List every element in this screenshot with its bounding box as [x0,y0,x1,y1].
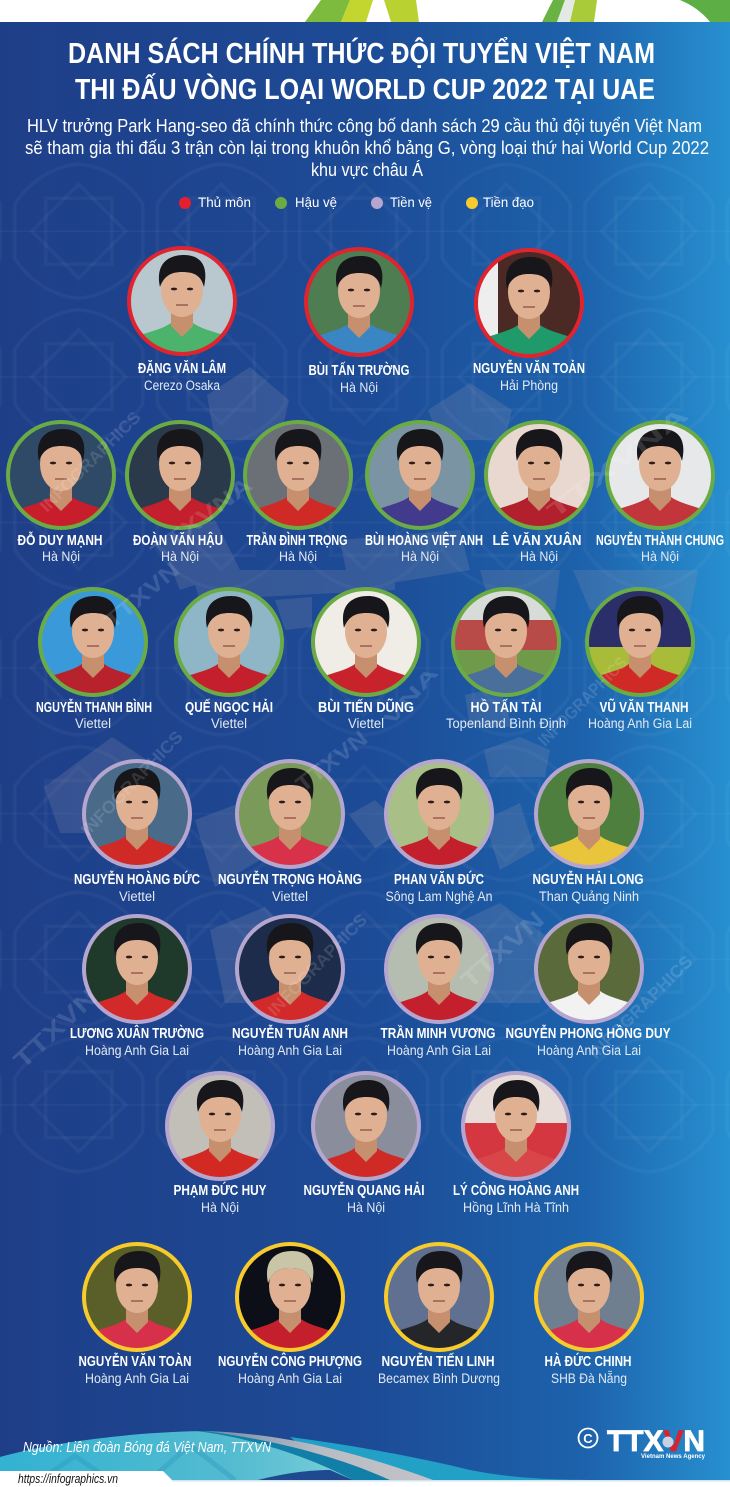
player: Bùi Tấn Trường: Hà Nội [340,380,378,395]
website url: https://infographics.vn [18,1471,118,1486]
player: Nguyễn Trọng Hoàng: NGUYỄN TRỌNG HOÀNG [218,871,362,888]
player: Đặng Văn Lâm [127,246,237,390]
player: Phan Văn Đức [384,759,494,904]
player: Nguyễn Tuấn Anh [228,916,352,1058]
watermarks: INFOGRAPHICS [36,408,145,516]
player: Nguyễn Văn Toàn [75,1244,199,1386]
player: Trần Đình Trọng: Hà Nội [279,549,317,564]
player: Trần Minh Vương: TRẦN MINH VƯƠNG [380,1025,496,1042]
player: Nguyễn Trọng Hoàng: Viettel [272,889,308,904]
player: Đặng Văn Lâm: ĐẶNG VĂN LÂM [138,359,226,377]
watermarks: TTXVN [9,984,103,1074]
player: Lương Xuân Trường: Hoàng Anh Gia Lai [85,1043,189,1058]
player: Phan Văn Đức: PHAN VĂN ĐỨC [394,870,484,888]
player: Nguyễn Thành Chung [596,422,724,564]
watermarks: TTXVN [291,726,372,797]
player: Lương Xuân Trường [70,916,204,1058]
player: Đỗ Duy Mạnh: ĐỖ DUY MẠNH [18,531,102,549]
player: Hà Đức Chinh [534,1242,644,1386]
player: Đoàn Văn Hậu [125,420,235,563]
player: Vũ Văn Thanh: Hoàng Anh Gia Lai [588,716,692,731]
player: Đặng Văn Lâm: Cerezo Osaka [144,378,220,393]
player: Quế Ngọc Hải: Viettel [211,716,247,731]
watermarks: INFOGRAPHICS [77,727,187,840]
player: Nguyễn Thành Chung: Hà Nội [641,549,679,564]
player: Đoàn Văn Hậu: Hà Nội [161,549,199,564]
legend: Tiền vệ [390,194,432,210]
player: Nguyễn Tuấn Anh: NGUYỄN TUẤN ANH [232,1025,348,1042]
watermarks: TTXVN [456,906,550,994]
player: Nguyễn Quang Hải: Hà Nội [347,1200,385,1215]
player: Nguyễn Tuấn Anh: Hoàng Anh Gia Lai [238,1043,342,1058]
player: Nguyễn Văn Toàn: Hoàng Anh Gia Lai [85,1371,189,1386]
player: Nguyễn Quang Hải: NGUYỄN QUANG HẢI [304,1182,424,1199]
player: Lê Văn Xuân [484,420,594,563]
TTXVN logo: TTXVN [607,1425,705,1458]
copyright symbol [578,1428,598,1448]
player: Phạm Đức Huy: PHẠM ĐỨC HUY [174,1181,267,1199]
watermarks [9,402,696,1074]
top white strip [0,0,730,22]
player: Nguyễn Văn Toản: Hải Phòng [500,378,558,393]
player: Nguyễn Văn Toản [467,250,591,393]
player: Nguyễn Thanh Bình [31,589,155,731]
player: Lý Công Hoàng Anh: LÝ CÔNG HOÀNG ANH [453,1181,579,1199]
watermarks: TTXVNA [146,472,257,564]
player: Nguyễn Công Phượng [218,1244,362,1386]
player: Nguyễn Văn Toàn: NGUYỄN VĂN TOÀN [78,1353,192,1370]
player: Bùi Tiến Dũng [311,587,421,728]
player: Phạm Đức Huy [165,1071,275,1214]
intro paragraph: khu vực châu Á [311,159,424,180]
TTXVN logo: Vietnam News Agency [641,1454,706,1460]
footer wave [0,1431,605,1480]
source line: Nguồn: Liên đoàn Bóng đá Việt Nam, TTXVN [23,1440,271,1456]
player: Bùi Tiến Dũng: Viettel [348,716,384,731]
player: Nguyễn Hoàng Đức: Viettel [119,889,155,904]
player: Bùi Hoàng Việt Anh [358,422,483,564]
player: Nguyễn Phong Hồng Duy [506,916,671,1058]
player: Nguyễn Văn Toản: NGUYỄN VĂN TOẢN [473,360,585,377]
player: Trần Đình Trọng [243,420,353,563]
player: Nguyễn Quang Hải [304,1073,428,1215]
player: Lý Công Hoàng Anh [453,1073,579,1215]
player: Nguyễn Hải Long [527,761,651,904]
watermarks: INFOGRAPHICS [585,952,696,1063]
player: Bùi Tấn Trường: BÙI TẤN TRƯỜNG [308,361,410,379]
player: Hà Đức Chinh: HÀ ĐỨC CHINH [544,1352,632,1370]
player: Bùi Tiến Dũng: BÙI TIẾN DŨNG [318,698,414,716]
legend [179,194,534,210]
player: Nguyễn Tiến Linh: NGUYỄN TIẾN LINH [382,1353,494,1370]
player: Nguyễn Hải Long: NGUYỄN HẢI LONG [532,871,644,888]
player: Bùi Hoàng Việt Anh: Hà Nội [401,549,439,564]
player: Hồ Tấn Tài [444,589,568,731]
player: Nguyễn Phong Hồng Duy: Hoàng Anh Gia Lai [537,1043,641,1058]
player: Nguyễn Tiến Linh [377,1244,501,1386]
player: Vũ Văn Thanh [585,587,695,731]
player: Lương Xuân Trường: LƯƠNG XUÂN TRƯỜNG [70,1024,204,1042]
player: Phạm Đức Huy: Hà Nội [201,1200,239,1215]
player: Vũ Văn Thanh: VŨ VĂN THANH [600,698,688,716]
player: Bùi Hoàng Việt Anh: BÙI HOÀNG VIỆT ANH [365,531,483,549]
player: Quế Ngọc Hải [174,587,284,728]
player: Hồ Tấn Tài: HỒ TẤN TÀI [470,698,542,716]
decorative green ribbons [305,0,730,22]
player: Nguyễn Thanh Bình: Viettel [75,716,111,731]
player: Đỗ Duy Mạnh [0,422,123,564]
intro paragraph [25,115,709,180]
player: Bùi Tấn Trường [304,247,414,394]
player: Nguyễn Hoàng Đức [74,761,200,904]
player: Nguyễn Tiến Linh: Becamex Bình Dương [378,1371,500,1386]
player: Nguyễn Công Phượng: Hoàng Anh Gia Lai [238,1371,342,1386]
player: Trần Minh Vương [377,916,501,1058]
player: Lý Công Hoàng Anh: Hồng Lĩnh Hà Tĩnh [463,1200,569,1215]
player: Nguyễn Phong Hồng Duy: NGUYỄN PHONG HỒNG DUY [506,1024,671,1042]
footer white band [0,1471,730,1487]
title [68,36,655,106]
legend: Thủ môn [198,194,251,210]
title: DANH SÁCH CHÍNH THỨC ĐỘI TUYỂN VIỆT NAM [68,36,655,70]
player: Nguyễn Trọng Hoàng [218,761,362,904]
player: Nguyễn Thanh Bình: NGUYỄN THANH BÌNH [36,699,152,716]
player: Nguyễn Công Phượng: NGUYỄN CÔNG PHƯỢNG [218,1352,362,1370]
player: Đỗ Duy Mạnh: Hà Nội [42,549,80,564]
watermarks: INFOGRAPHICS [534,653,631,750]
watermarks: TTXVNA [542,402,693,524]
player: Quế Ngọc Hải: QUẾ NGỌC HẢI [185,699,273,716]
player: Hà Đức Chinh: SHB Đà Nẵng [551,1371,627,1386]
copyright symbol: C [583,1431,593,1446]
player: Nguyễn Hải Long: Than Quảng Ninh [539,889,639,904]
title: THI ĐẤU VÒNG LOẠI WORLD CUP 2022 TẠI UAE [75,72,655,106]
player: Trần Đình Trọng: TRẦN ĐÌNH TRỌNG [246,532,348,549]
player: Đoàn Văn Hậu: ĐOÀN VĂN HẬU [133,531,223,549]
player: Hồ Tấn Tài: Topenland Bình Định [446,716,566,731]
legend: Hậu vệ [295,194,337,210]
watermarks: VNA [379,663,442,730]
player: Nguyễn Hoàng Đức: NGUYỄN HOÀNG ĐỨC [74,870,200,888]
player: Trần Minh Vương: Hoàng Anh Gia Lai [387,1043,491,1058]
watermarks: TTXVN [99,557,184,634]
player: Lê Văn Xuân: Hà Nội [520,549,558,564]
watermarks: INFOGRAPHICS [264,910,371,1020]
legend: Tiền đạo [483,194,534,210]
player: Lê Văn Xuân: LÊ VĂN XUÂN [492,531,582,549]
player: Phan Văn Đức: Sông Lam Nghệ An [386,889,492,904]
